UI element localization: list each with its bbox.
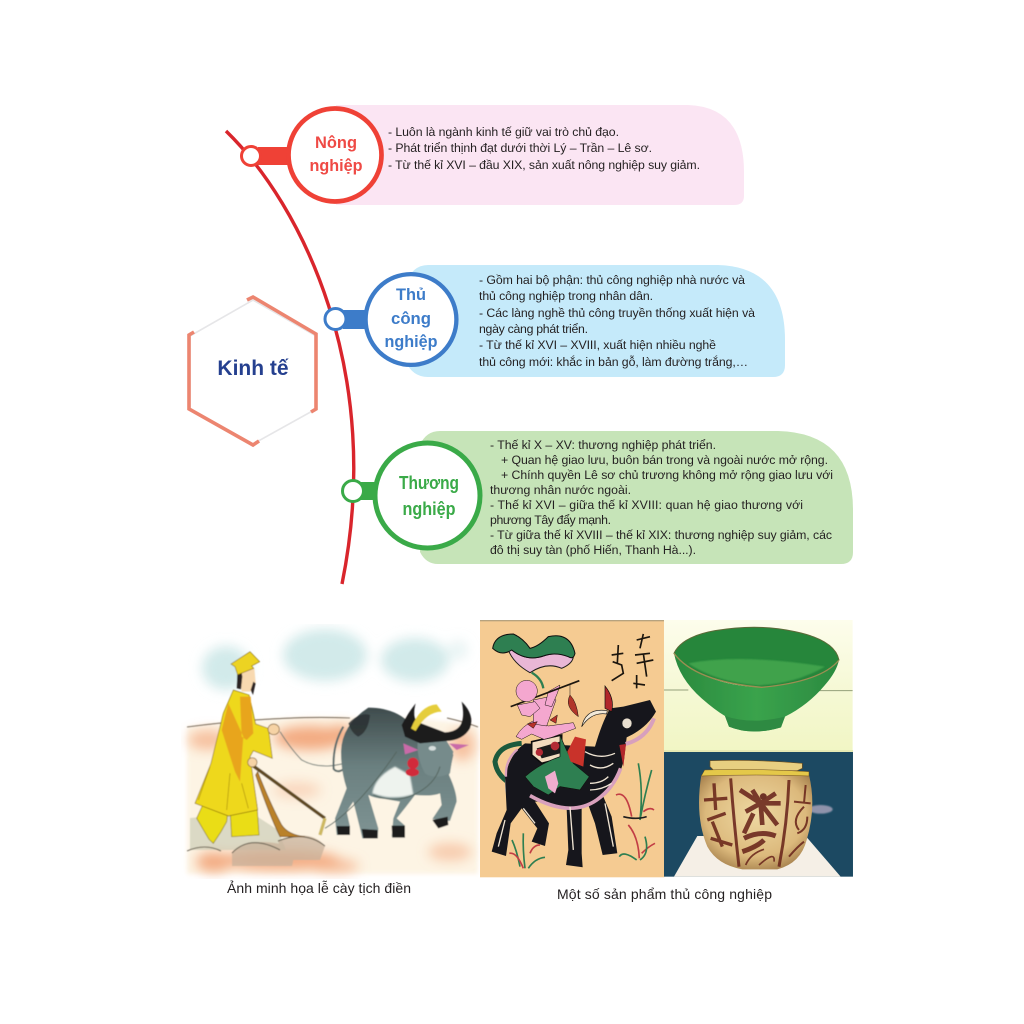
plough: [253, 766, 325, 837]
heading: nghiệp: [402, 499, 456, 519]
description: - Gồm hai bộ phận: thủ công nghiệp nhà nước và: [479, 273, 745, 287]
heading circle: [375, 443, 480, 548]
saddle: [532, 735, 562, 763]
tail: [334, 727, 360, 771]
buffalo silhouette: [492, 700, 656, 867]
description: [479, 273, 755, 369]
bowl body: [674, 653, 839, 731]
head: [516, 680, 537, 702]
ground: [187, 717, 478, 874]
image: green ceramic bowl: [664, 620, 853, 752]
heading circle: [366, 274, 456, 365]
calligraphy: [612, 634, 653, 688]
jar backdrop: [664, 752, 853, 877]
hexagon accents: [189, 297, 316, 445]
jar decoration: [704, 778, 811, 867]
flute: [511, 681, 579, 707]
timeline curve: [226, 131, 354, 584]
head pink band: [626, 718, 654, 744]
green saddle cloth: [525, 735, 589, 795]
horn: [582, 710, 607, 727]
description: thủ công mới: khắc in bản gỗ, làm đường trắng,…: [479, 354, 748, 369]
jar body: [699, 775, 812, 869]
image: Dong Ho woodblock print (480,620 origin): [480, 620, 664, 877]
white markings: [498, 752, 615, 850]
description: đô thị suy tàn (phố Hiến, Thanh Hà...).: [490, 543, 696, 557]
buffalo tail: [495, 743, 522, 783]
heading circle: [288, 108, 382, 202]
flute boy: [511, 680, 579, 739]
description: thủ công nghiệp trong nhân dân.: [479, 289, 653, 303]
connector: [258, 147, 292, 165]
text panel background: [336, 105, 744, 205]
node circle: [242, 146, 260, 166]
head: [239, 668, 256, 692]
description: - Các làng nghề thủ công truyền thống xuất hiện và: [479, 306, 755, 320]
heading: nghiệp: [384, 332, 438, 351]
ropes: [325, 752, 440, 828]
node circle: [325, 308, 346, 330]
description: [490, 438, 833, 557]
description: - Thế kỉ X – XV: thương nghiệp phát triển.: [490, 438, 716, 452]
red flower: [406, 758, 419, 776]
hexagon: Kinh tế: [189, 297, 316, 445]
description: [388, 125, 700, 172]
water buffalo (325,695 origin): [325, 702, 471, 838]
description: ngày càng phát triển.: [479, 322, 588, 336]
ear: [605, 686, 612, 712]
connector: [343, 310, 370, 329]
chili charm: [568, 685, 578, 717]
image: patterned ceramic jar (664,750 origin): [664, 750, 853, 877]
hexagon inner outline: [190, 300, 316, 444]
description: thương nhân nước ngoài.: [490, 483, 631, 497]
bowl interior: [674, 627, 839, 687]
collar: [619, 744, 626, 767]
eye: [429, 746, 436, 751]
description: - Từ thế kỉ XVI – XVIII, xuất hiện nhiều nghề: [479, 338, 716, 352]
heading: Nông: [315, 133, 357, 152]
yellow robe: [195, 690, 272, 816]
belly: [372, 767, 413, 797]
panel: Thủ công nghiệp: [325, 265, 785, 377]
horns: [402, 702, 471, 743]
pedestal: [674, 836, 841, 877]
heading: công: [391, 309, 431, 328]
description: - Luôn là ngành kinh tế giữ vai trò chủ đạo.: [388, 125, 619, 139]
pink ears: [403, 743, 469, 754]
connector: [360, 482, 380, 500]
trousers: [197, 800, 228, 843]
right arm: [545, 685, 560, 707]
heading: Thương: [399, 473, 459, 493]
back dark patch: [348, 714, 370, 737]
description: - Phát triển thịnh đạt dưới thời Lý – Trần – Lê sơ.: [388, 141, 652, 155]
caption: handicraft products: Một số sản phẩm thủ công nghiệp: [557, 886, 772, 902]
backdrop flare: [809, 805, 833, 814]
description: - Từ giữa thế kỉ XVIII – thế kỉ XIX: thương nghiệp suy giảm, các: [490, 528, 832, 542]
lotus leaf: [493, 634, 575, 688]
reins: [280, 732, 355, 766]
illustration: ploughing ceremony: [187, 629, 478, 874]
jar neck: [710, 760, 802, 771]
robe shading: [222, 697, 253, 782]
saddle flower: [545, 771, 558, 793]
description: - Từ thế kỉ XVI – đầu XIX, sản xuất nông nghiệp suy giảm.: [388, 158, 700, 172]
panel: Thương nghiệp: [342, 431, 853, 564]
node circle: [342, 480, 364, 502]
yoke: [411, 704, 442, 731]
buffalo: [492, 686, 656, 867]
body: [335, 708, 457, 838]
bowl backdrop: [664, 620, 853, 752]
heading: nghiệp: [310, 156, 362, 175]
boy legs: [516, 720, 576, 739]
caption: ploughing ceremony: Ảnh minh họa lễ cày tịch điền: [227, 880, 411, 896]
text panel background: [405, 265, 785, 377]
text panel background: [420, 431, 853, 564]
left arm: [517, 702, 540, 717]
boy torso: [533, 696, 556, 726]
heading: Thủ: [396, 285, 426, 304]
hands: [268, 724, 279, 735]
wood background: [480, 620, 664, 877]
description: + Chính quyền Lê sơ chủ trương không mở rộng giao lưu với: [501, 468, 833, 482]
jar shoulder: [701, 769, 809, 776]
king with plough (185,640 origin): [195, 652, 325, 843]
eye: [622, 718, 632, 728]
label: Kinh tế: [217, 357, 289, 380]
red shorts: [527, 715, 557, 728]
head: [417, 738, 453, 777]
description: - Thế kỉ XVI – giữa thế kỉ XVIII: quan hệ giao thương với: [490, 498, 803, 512]
plants: [509, 763, 655, 868]
description: phương Tây đẩy mạnh.: [490, 513, 611, 527]
panel: Nông nghiệp: [242, 105, 744, 205]
belly trim: [530, 768, 621, 808]
hat: [231, 652, 260, 675]
description: + Quan hệ giao lưu, buôn bán trong và ngoài nước mở rộng.: [501, 453, 828, 467]
sky washes: [202, 629, 468, 690]
hooves: [337, 817, 448, 838]
